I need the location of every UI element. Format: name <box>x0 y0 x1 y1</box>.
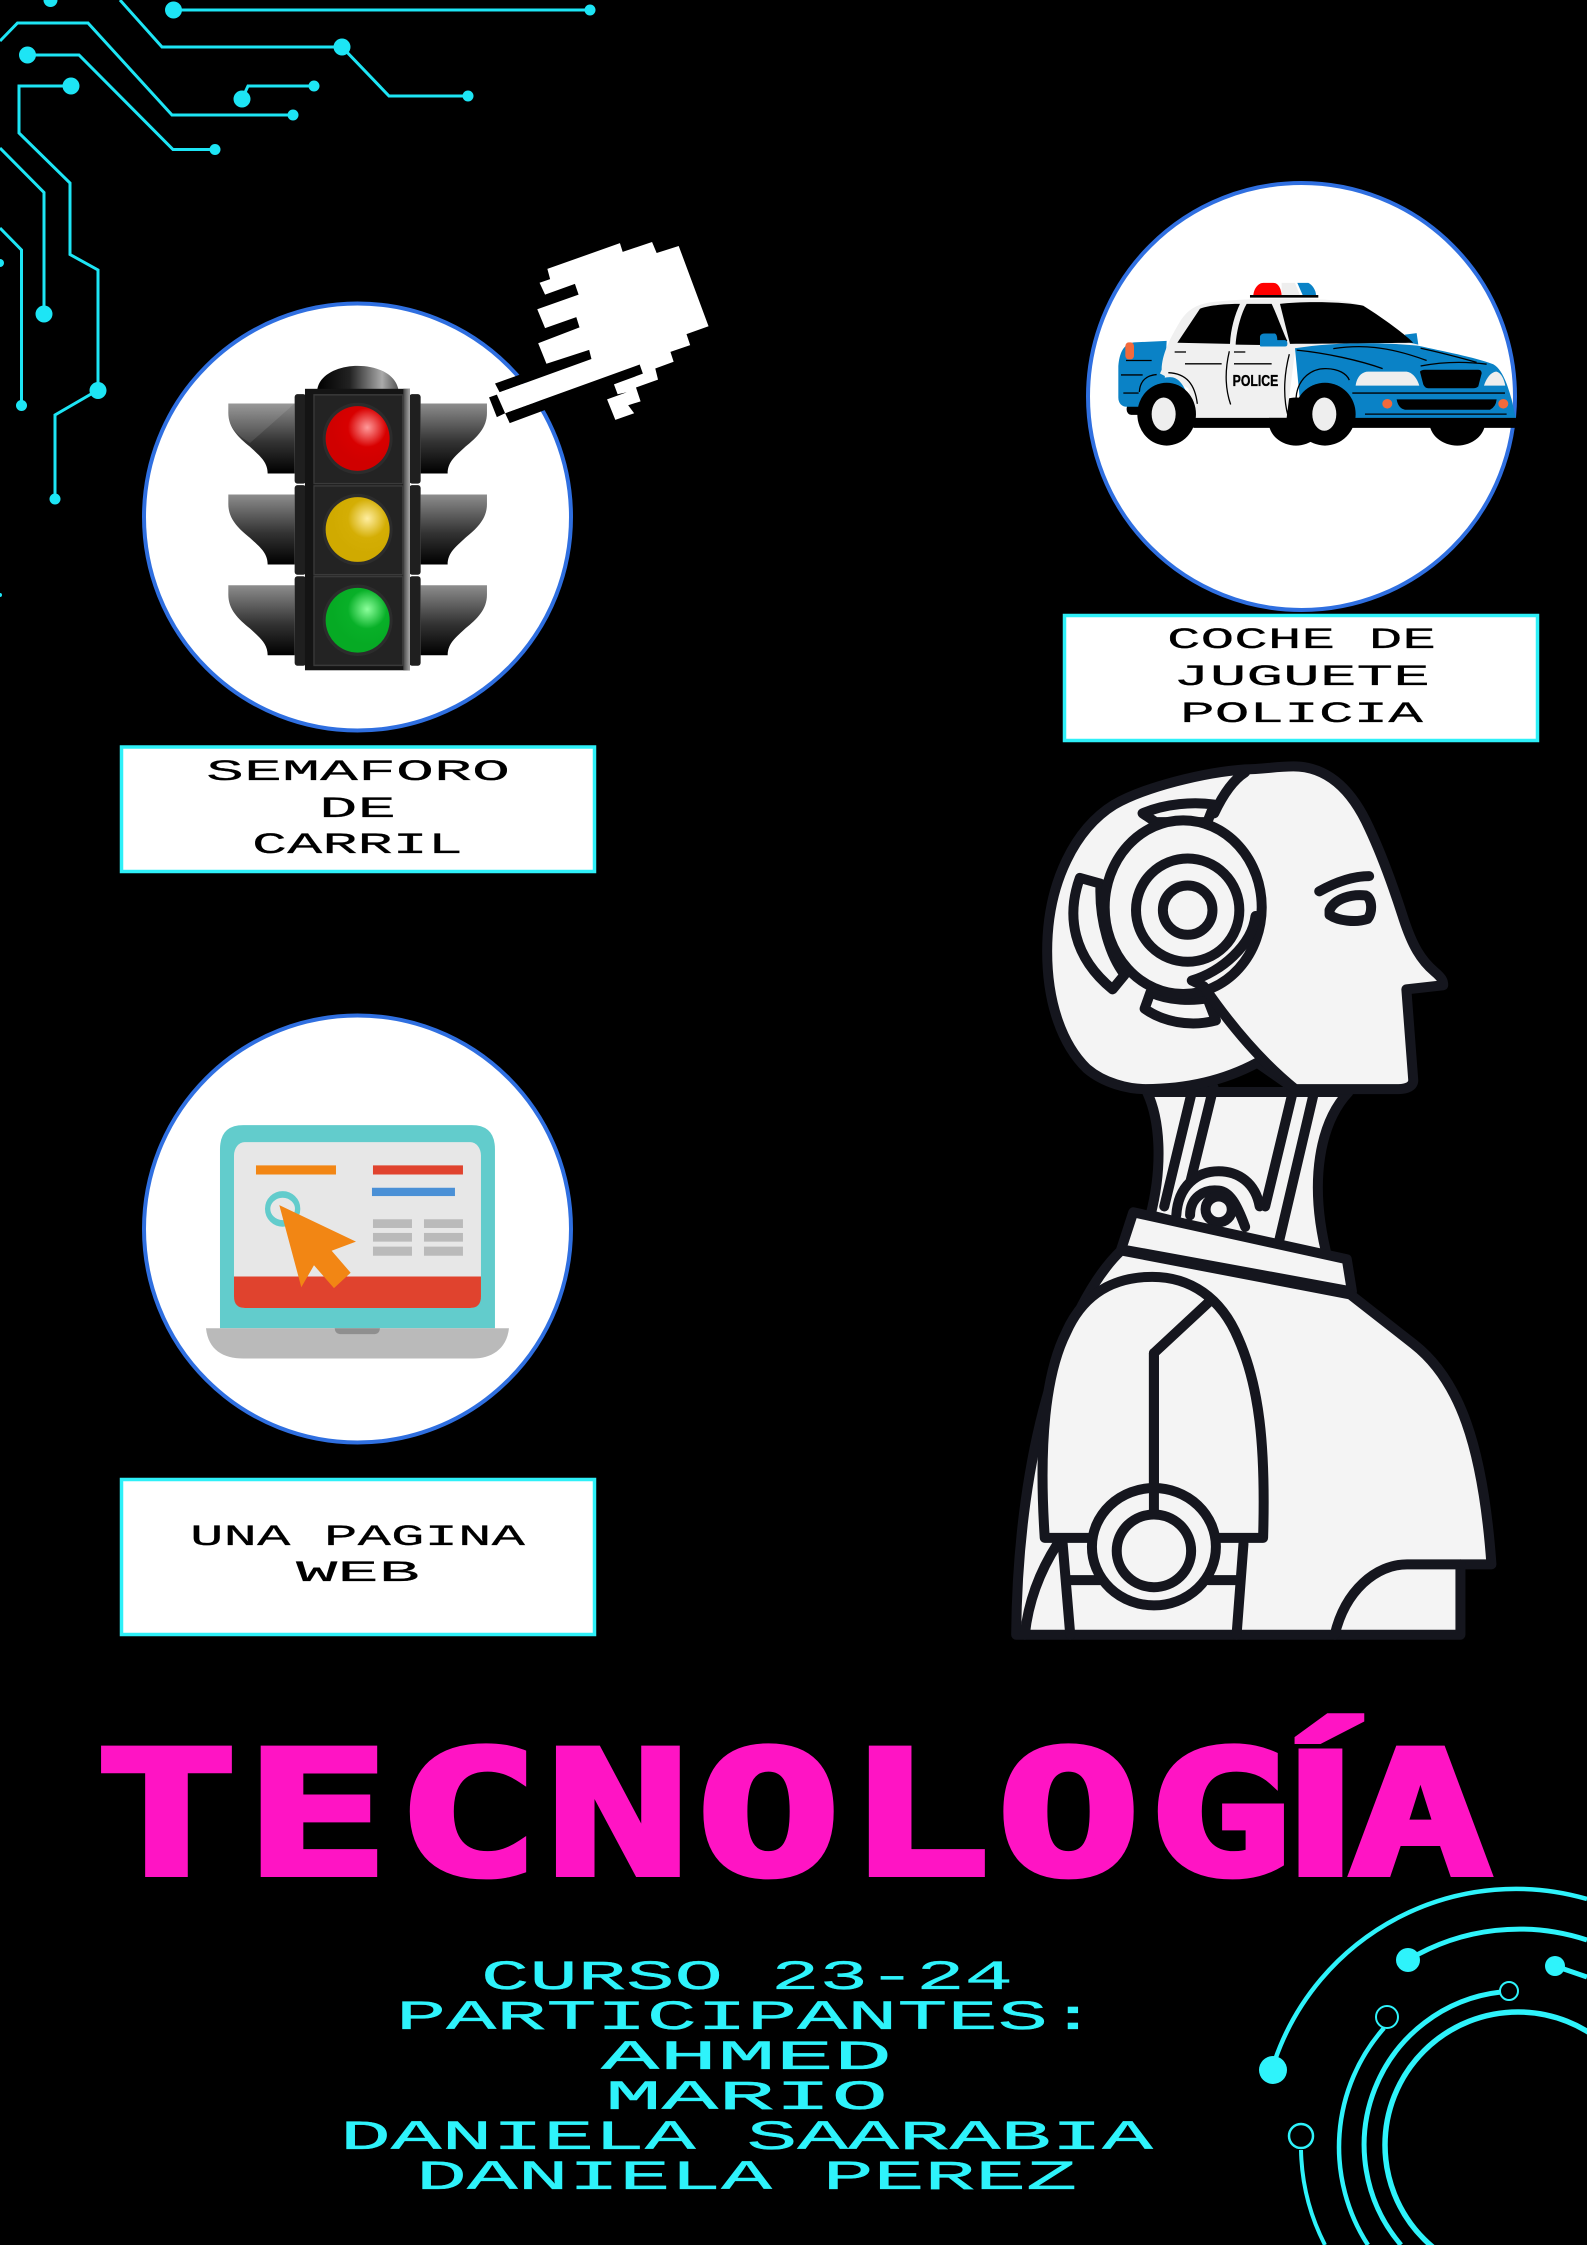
label: semaforo de carril <box>122 747 594 872</box>
icon: traffic light <box>228 366 487 670</box>
icon: police car <box>1118 283 1516 446</box>
text block: course and participants <box>340 1954 1155 2202</box>
icon: pixel hand cursor <box>489 242 709 423</box>
label: semaforo de carril: DE <box>319 793 396 827</box>
illustration: robot <box>1016 766 1491 1635</box>
label: una pagina web <box>122 1480 594 1634</box>
icon: laptop <box>206 1125 509 1359</box>
circuit lines: top left <box>0 0 596 597</box>
text block: course and participants: AHMED <box>601 2034 892 2082</box>
text block: course and participants: DANIELA PEREZ <box>416 2154 1077 2202</box>
label: coche de juguete policia: JUGUETE <box>1173 661 1430 695</box>
label: coche de juguete policia <box>1064 616 1538 740</box>
label: semaforo de carril: CARRIL <box>252 829 463 863</box>
text block: course and participants: DANIELA SAARABIA <box>340 2114 1155 2162</box>
panel: traffic light circle <box>144 304 571 730</box>
text block: course and participants: CURSO 23-24 <box>481 1954 1013 2002</box>
text block: course and participants: PARTICIPANTES: <box>396 1994 1098 2042</box>
title: TECNOLOGÍA <box>95 1713 1492 1915</box>
text: police: POLICE <box>1233 373 1278 390</box>
circuit arcs: bottom right <box>1259 1889 1587 2245</box>
label: semaforo de carril: SEMAFORO <box>206 756 510 790</box>
label: coche de juguete policia: POLICIA <box>1180 698 1423 732</box>
label: una pagina web: UNA PAGINA <box>190 1521 525 1555</box>
label: una pagina web: WEB <box>296 1557 420 1591</box>
panel: web page circle <box>144 1016 571 1442</box>
label: coche de juguete policia: COCHE DE <box>1167 624 1436 658</box>
text block: course and participants: MARIO <box>605 2074 888 2122</box>
panel: police car circle <box>1088 183 1516 610</box>
